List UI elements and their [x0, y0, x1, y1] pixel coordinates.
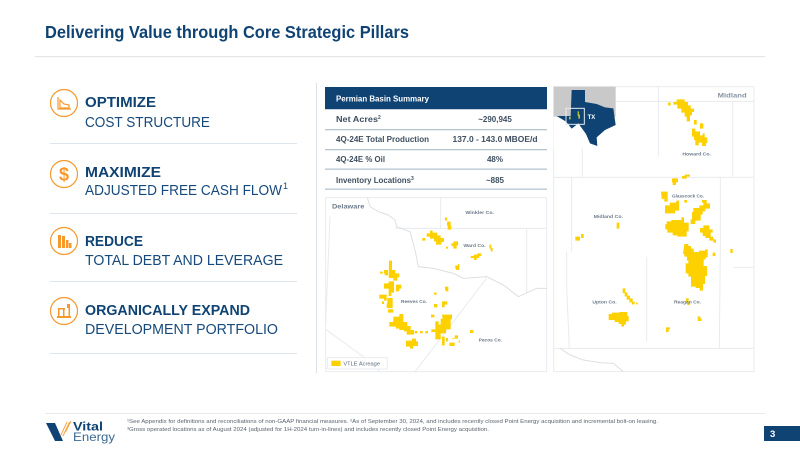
- county labels: Midland: [592, 151, 712, 305]
- footnotes: ³Gross operated locations as of August 2024 (adjusted for 1H-2024 turn-in-lines) and includes recently closed Point Energy acquisition.: [127, 427, 489, 433]
- pillar: optimize cost structure: OPTIMIZE: [85, 95, 156, 111]
- pillar: organically expand development portfolio: [50, 298, 278, 338]
- panel: strategic pillars: [50, 90, 297, 354]
- map: Delaware basin: [326, 198, 547, 372]
- pillar: maximize adjusted free cash flow: MAXIMIZE: [85, 165, 161, 181]
- logo: Vital Energy: [46, 421, 115, 444]
- page number: 3: [770, 429, 775, 440]
- pillar: reduce total debt and leverage: TOTAL DEBT AND LEVERAGE: [85, 253, 283, 269]
- icon: dollar sign: [50, 160, 78, 188]
- table: Permian Basin summary: 2: [378, 115, 381, 121]
- table: Permian Basin summary: 137.0 - 143.0 MBOE/d: [452, 135, 538, 144]
- footnotes: ¹See Appendix for definitions and reconciliations of non-GAAP financial measures. ²As of September 30, 2024, and includes recently closed Point Energy acquisition and incremental bolt-on leasing.: [127, 419, 658, 425]
- label: Midland: Midland: [718, 92, 747, 99]
- table: Permian Basin summary: Net Acres: [336, 115, 379, 124]
- table: Permian Basin summary: 3: [411, 176, 414, 182]
- icon: declining cost chart: [50, 90, 78, 116]
- county labels: Delaware: Pecos Co.: [479, 337, 503, 343]
- table: Permian Basin summary: [325, 87, 547, 190]
- map: Midland basin: [554, 87, 754, 372]
- county labels: Delaware: [401, 210, 503, 343]
- inset map: Texas locator: [554, 87, 616, 148]
- page number: [764, 426, 800, 441]
- county labels: Midland: Glasscock Co.: [672, 194, 705, 200]
- pillar: organically expand development portfolio: ORGANICALLY EXPAND: [85, 303, 250, 319]
- county labels: Delaware: Reeves Co.: [401, 299, 428, 305]
- pillar: reduce total debt and leverage: [50, 228, 283, 269]
- table: Permian Basin summary: 4Q-24E % Oil: [336, 155, 385, 164]
- pillar: optimize cost structure: COST STRUCTURE: [85, 115, 210, 131]
- label: Delaware: Delaware: [332, 204, 365, 211]
- county labels: Delaware: Winkler Co.: [465, 210, 495, 216]
- icon: dollar sign: $: [59, 164, 69, 184]
- county labels: Midland: Howard Co.: [682, 151, 712, 157]
- pillar: reduce total debt and leverage: REDUCE: [85, 234, 143, 250]
- icon: pumpjack: [50, 298, 78, 324]
- logo: Vital Energy: Energy: [73, 432, 115, 444]
- county labels: Delaware: Ward Co.: [463, 243, 486, 249]
- logo: Vital Energy: Vital: [73, 422, 103, 434]
- pillar: optimize cost structure: [50, 90, 210, 131]
- legend: VTLE acreage: VTLE Acreage: [343, 362, 380, 368]
- table: Permian Basin summary: ~885: [486, 176, 505, 185]
- county labels: Midland: Upton Co.: [592, 299, 617, 305]
- table: Permian Basin summary: Inventory Locations: [336, 176, 412, 185]
- county labels: Midland: Reagan Co.: [674, 299, 702, 305]
- pillar: maximize adjusted free cash flow: ADJUSTED FREE CASH FLOW: [85, 183, 282, 199]
- icon: descending bars: [50, 228, 78, 254]
- pillar: maximize adjusted free cash flow: 1: [283, 181, 288, 191]
- table: Permian Basin summary: ~290,945: [478, 115, 512, 124]
- legend: VTLE acreage: [327, 358, 387, 369]
- inset map: Texas locator: TX: [588, 115, 595, 121]
- table: Permian Basin summary: 4Q-24E Total Production: [336, 135, 429, 144]
- pillar: organically expand development portfolio: DEVELOPMENT PORTFOLIO: [85, 322, 278, 338]
- table: Permian Basin summary: 48%: [487, 155, 503, 164]
- acreage: VTLE Delaware tracts: [379, 217, 493, 349]
- county labels: Midland: Midland Co.: [594, 214, 624, 220]
- acreage: VTLE Midland tracts: [575, 99, 733, 332]
- title: Delivering Value through Core Strategic Pillars: [45, 22, 409, 42]
- pillar: maximize adjusted free cash flow: [50, 160, 288, 199]
- table: Permian Basin summary: Permian Basin Summary: [336, 94, 430, 104]
- footnotes: [127, 419, 658, 433]
